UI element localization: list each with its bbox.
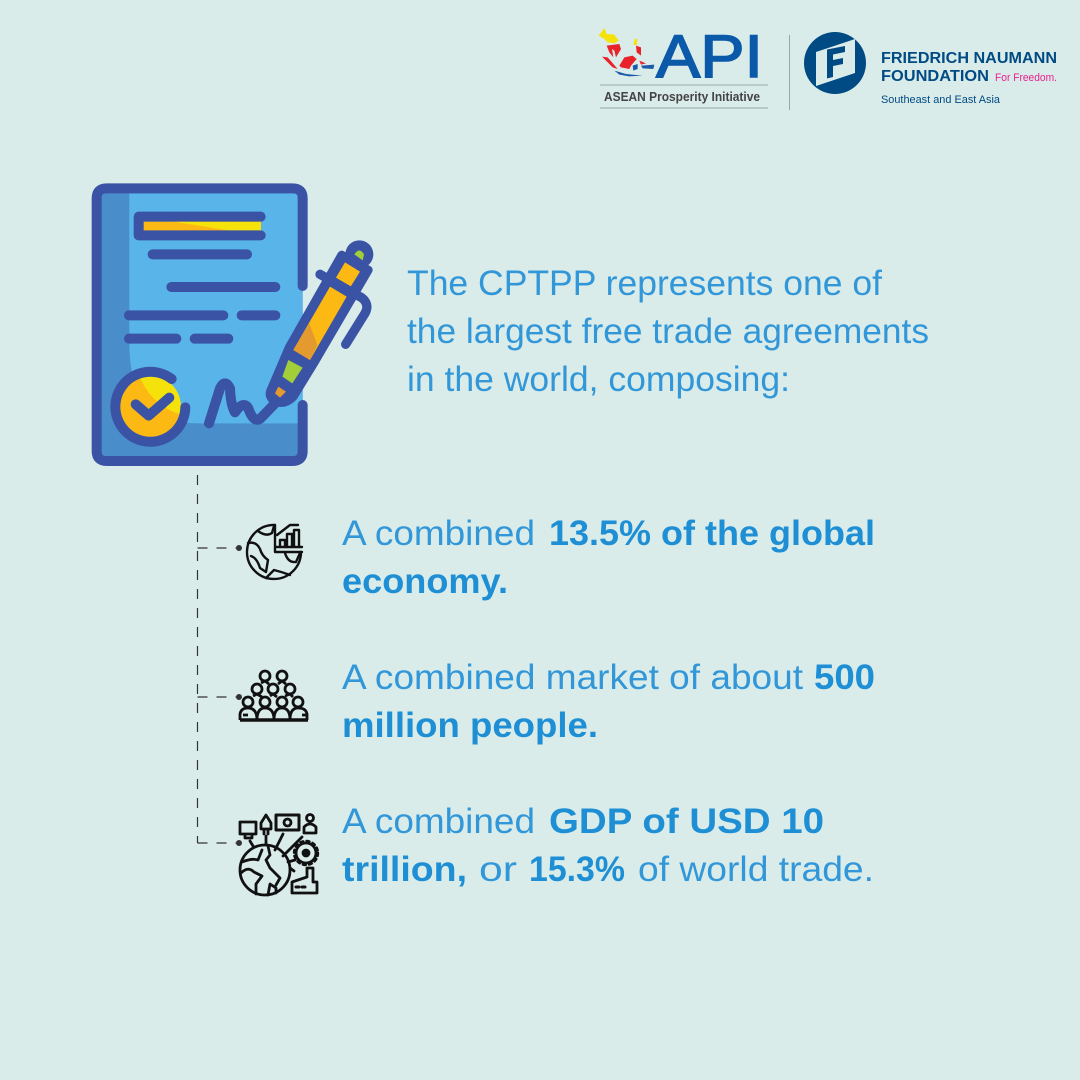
heading text: the largest free trade agreements: [407, 312, 929, 351]
icon: signed document with pen: [97, 188, 373, 461]
API wordmark: API: [656, 23, 763, 90]
ASEAN Prosperity Initiative label: ASEAN Prosperity Initiative: [604, 89, 760, 104]
document sheet: [97, 188, 303, 461]
bullet 3 text: or: [479, 850, 517, 889]
bullet 3 text: GDP of USD 10: [549, 802, 824, 841]
bullet 2 text: A combined market of about: [342, 658, 803, 697]
bullet 1 text: 13.5% of the global: [549, 514, 875, 553]
person: [306, 814, 314, 822]
bullet 2 text: 500: [814, 658, 875, 697]
dashed connector: [198, 475, 242, 846]
globe: [240, 845, 290, 895]
logo: Friedrich Naumann Foundation: FOUNDATION: [881, 68, 989, 85]
icon: globe with bar chart: [247, 525, 302, 579]
bullet 2 text: million people.: [342, 706, 598, 745]
monitor: [240, 822, 256, 838]
bullet 3 text: [342, 802, 874, 889]
factory: [292, 868, 317, 893]
gear: [296, 843, 316, 863]
logo: Friedrich Naumann Foundation: [804, 32, 1057, 106]
icon: F badge: [804, 32, 866, 94]
icon: globe with economy symbols: [240, 814, 318, 895]
region label: Southeast and East Asia: [881, 94, 1001, 106]
logo: ASEAN Prosperity Initiative: [599, 23, 768, 108]
rocket: [261, 815, 271, 834]
bullet 3 text: of world trade.: [638, 850, 874, 889]
tagline: For Freedom.: [995, 72, 1057, 84]
bullet 2 text: [342, 658, 875, 745]
check badge: [119, 376, 181, 437]
signature: [209, 383, 277, 423]
bullet 3 text: 15.3%: [529, 850, 625, 889]
heading text: in the world, composing:: [407, 360, 790, 399]
bullet 1 text: A combined: [342, 514, 535, 553]
foundation name: FRIEDRICH NAUMANN: [881, 50, 1057, 67]
heading text: [407, 264, 929, 399]
bullet 1 text: economy.: [342, 562, 508, 601]
document outline: [97, 188, 303, 461]
text lines: [129, 254, 275, 339]
bullet 1 text: [342, 514, 875, 601]
highlighted heading: [143, 222, 261, 231]
links: [250, 834, 302, 871]
icon: ASEAN map: [599, 28, 654, 76]
bullet 3 text: trillion,: [342, 850, 467, 889]
bullet 3 text: A combined: [342, 802, 535, 841]
banknote: [276, 815, 299, 830]
heading text: The CPTPP represents one of: [407, 264, 882, 303]
pen: [270, 240, 373, 403]
icon: crowd of people: [240, 671, 308, 720]
